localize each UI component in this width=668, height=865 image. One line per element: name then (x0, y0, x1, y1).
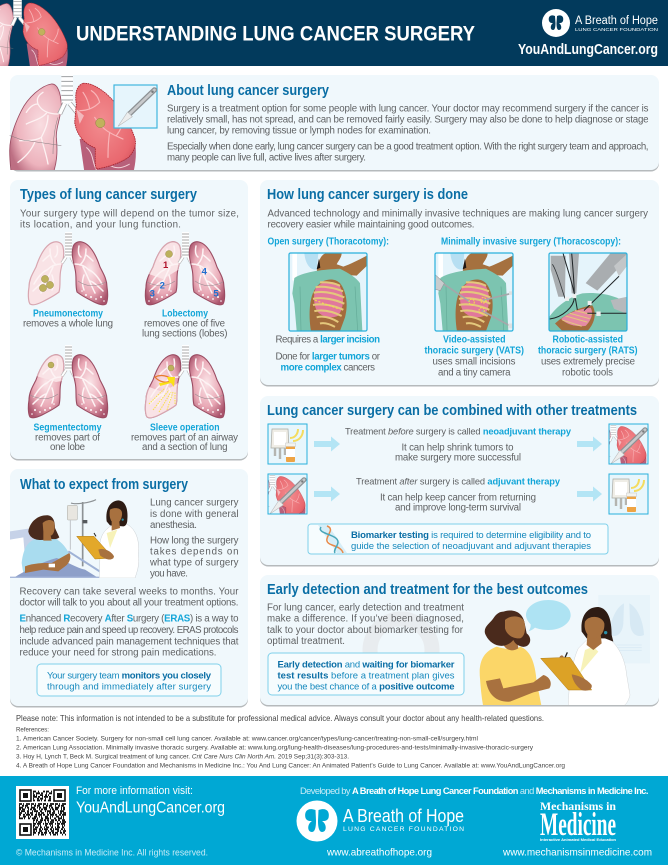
logo: A Breath of Hope: LUNG CANCER FOUNDATION (575, 27, 658, 32)
expect text beside illustration: you have. (150, 568, 188, 580)
ERAS text: include advanced pain management techniques that (20, 636, 239, 648)
callout: monitoring: through and immediately after surgery (47, 682, 211, 692)
panel: how lung cancer surgery is done (260, 180, 659, 386)
references: 2. American Lung Association. Minimally invasive thoracic surgery. Available at: www.lung.org/lung-health-diseases/lung-procedures-and-tests/minimally-invasive-thoracic-surgery (16, 744, 534, 752)
open surgery subheading: Open surgery (Thoracotomy): (268, 236, 389, 248)
panel: combined treatments (245, 396, 659, 566)
recovery text: doctor will talk to you about all your treatment options. (20, 598, 238, 608)
types intro: Your surgery type will depend on the tumor size, (20, 208, 239, 220)
diagram: segmentectomy (28, 345, 108, 453)
diagram: lobectomy: 5 (213, 288, 219, 300)
open surgery caption: Done for larger tumors or (276, 352, 381, 362)
about lungs illustration (9, 75, 136, 170)
early text: talk to your doctor about biomarker testing for (267, 625, 464, 636)
panel: early detection and treatment (260, 575, 659, 707)
types intro: its location, and your lung function. (20, 220, 181, 230)
logo: A Breath of Hope: A Breath of Hope (575, 15, 658, 27)
callout: biomarker testing: guide the selection of neoadjuvant and adjuvant therapies (351, 541, 591, 552)
callout: biomarker testing (308, 524, 608, 554)
row: adjuvant therapy: It can help keep cancer from returning (380, 492, 536, 504)
diagram: segmentectomy: one lobe (50, 442, 85, 453)
footer url: mechanisms in medicine: www.mechanismsinmedicine.com (502, 846, 652, 858)
header banner (0, 0, 668, 69)
logo: A Breath of Hope Lung Cancer Foundation: LUNG CANCER FOUNDATION (343, 826, 464, 833)
logo: Mechanisms in Medicine: Medicine (540, 807, 616, 843)
diagram: sleeve operation: and a section of lung (142, 442, 228, 453)
early heading: Early detection and treatment for the best outcomes (267, 582, 588, 598)
about text (167, 104, 649, 164)
RATS caption: Robotic-assisted (552, 334, 623, 346)
callout: biomarker testing: Biomarker testing is required to determine eligibility and to (351, 530, 591, 541)
how intro (268, 208, 648, 230)
panel: types of lung cancer surgery (10, 180, 248, 460)
RATS caption: uses extremely precise (541, 356, 635, 368)
expect heading: What to expect from surgery (20, 477, 188, 493)
RATS caption (538, 334, 638, 378)
diagram: lobectomy: 4 (202, 267, 208, 278)
panel: about lung cancer surgery (10, 74, 659, 174)
diagram: lobectomy: removes one of five (144, 318, 225, 330)
faint scanner background (370, 619, 432, 681)
VATS caption: and a tiny camera (438, 368, 511, 378)
logo: Mechanisms in Medicine: Mechanisms in (540, 801, 617, 813)
callout: early detection: Early detection and waiting for biomarker (278, 660, 455, 670)
expect text beside illustration: anesthesia. (150, 520, 197, 531)
callout: monitoring: Your surgery team monitors you closely (47, 670, 212, 682)
diagram: pneumonectomy (23, 232, 113, 330)
expect text beside illustration: what type of surgery (149, 558, 239, 568)
ERAS text: help reduce pain and speed up recovery. ERAS protocols (20, 625, 239, 636)
recovery text (20, 586, 239, 608)
expect text beside illustration: How long the surgery (150, 536, 239, 546)
row: adjuvant therapy: and improve long-term survival (395, 502, 521, 514)
QR code (16, 786, 69, 839)
diagram: lobectomy (142, 232, 228, 340)
logo: Mechanisms in Medicine (540, 801, 617, 843)
row: adjuvant therapy (245, 472, 648, 520)
diagram: pneumonectomy: removes a whole lung (23, 318, 113, 330)
header lungs illustration (0, 0, 68, 66)
about heading: About lung cancer surgery (167, 83, 329, 99)
references: 3. Hoy H, Lynch T, Beck M. Surgical treatment of lung cancer. Crit Care Nurs Clin North Am. 2019 Sep;31(3):303-313. (16, 754, 349, 760)
footer band (0, 776, 668, 865)
expect text beside illustration: Lung cancer surgery (150, 498, 239, 508)
row: neoadjuvant therapy: It can help shrink tumors to (402, 442, 514, 454)
illustration: patient in bed with doctor (10, 499, 139, 578)
early text: make a difference. If you’ve been diagnosed, (267, 614, 464, 624)
row: adjuvant therapy: Treatment after surgery is called adjuvant therapy (356, 476, 561, 486)
about text: Surgery is a treatment option for some people with lung cancer. Your doctor may recommend surgery if the cancer is (167, 104, 649, 114)
open surgery caption (276, 334, 381, 374)
image: RATS (549, 253, 627, 331)
diagram: segmentectomy: removes part of (35, 432, 100, 444)
developed by: Developed by A Breath of Hope Lung Cancer Foundation and Mechanisms in Medicine Inc. (300, 786, 648, 796)
row: neoadjuvant therapy: Treatment before surgery is called neoadjuvant therapy (345, 426, 572, 436)
diagram: segmentectomy: Segmentectomy (34, 422, 102, 434)
references: References: (16, 726, 49, 734)
diagram: sleeve operation (131, 345, 238, 453)
diagram: sleeve operation: removes part of an airway (131, 432, 238, 444)
references: 1. American Cancer Society. Surgery for non-small cell lung cancer. Available at: www.cancer.org/cancer/types/lung-cancer/treating-non-small-cell/surgery.html (16, 736, 478, 742)
references: 4. A Breath of Hope Lung Cancer Foundation and Mechanisms in Medicine Inc.: You And Lung Cancer: An Animated Patient’s Guide to Lung Cancer. Available at: www.YouAndLungCancer.org (16, 762, 565, 770)
callout: early detection (268, 653, 464, 695)
illustration: patient talking with doctor (480, 600, 644, 705)
open surgery caption: more complex cancers (280, 362, 375, 374)
expect text beside illustration: is done with general (150, 509, 238, 520)
VATS caption (424, 334, 524, 378)
about text: Especially when done early, lung cancer surgery can be a good treatment option. With the right surgery team and approach, (167, 142, 648, 152)
VATS caption: uses small incisions (432, 356, 516, 368)
expect text beside illustration (149, 498, 239, 580)
copyright: © Mechanisms in Medicine Inc. All rights reserved. (16, 848, 208, 858)
about text: many people can live full, active lives after surgery. (167, 152, 366, 164)
logo: A Breath of Hope (542, 9, 658, 37)
minimally invasive subheading: Minimally invasive surgery (Thoracoscopy): (441, 236, 621, 248)
how intro: recovery easier while maintaining good outcomes. (268, 220, 474, 230)
footer website: YouAndLungCancer.org (76, 800, 225, 816)
VATS caption: Video-assisted (443, 334, 506, 346)
panel: what to expect from surgery (10, 469, 248, 708)
diagram: lobectomy: 1 (163, 260, 169, 271)
callout: monitoring (37, 664, 221, 696)
icon: DNA helix (318, 525, 347, 553)
more information: For more information visit: (76, 785, 193, 797)
callout: early detection: test results before a treatment plan gives (278, 670, 455, 682)
types heading: Types of lung cancer surgery (20, 187, 197, 203)
image: VATS (435, 253, 513, 331)
recovery text: Recovery can take several weeks to months. Your (20, 586, 239, 598)
ERAS text: reduce your need for strong pain medications. (20, 648, 216, 658)
diagram: lobectomy: 3 (150, 288, 155, 300)
types intro (20, 208, 239, 230)
logo: A Breath of Hope Lung Cancer Foundation: A Breath of Hope (343, 806, 464, 826)
RATS caption: robotic tools (562, 368, 613, 378)
logo: A Breath of Hope Lung Cancer Foundation (296, 800, 464, 842)
ERAS text (20, 614, 239, 658)
expect text beside illustration: takes depends on (150, 546, 238, 558)
diagram: sleeve operation: Sleeve operation (150, 422, 220, 434)
VATS caption: thoracic surgery (VATS) (424, 346, 524, 356)
early text (267, 602, 464, 647)
about text: relatively small, has not spread, and can be removed fairly easily. Surgery may also be done to help diagnose or stage (167, 114, 648, 126)
early text: optimal treatment. (267, 636, 345, 647)
diagram: pneumonectomy: Pneumonectomy (33, 308, 103, 320)
row: neoadjuvant therapy (268, 422, 648, 470)
icon: scalpel (114, 85, 157, 128)
references (16, 726, 565, 770)
footer url: a breath of hope: www.abreathofhope.org (326, 846, 432, 858)
diagram: lobectomy: Lobectomy (162, 308, 208, 320)
early text: For lung cancer, early detection and treatment (267, 602, 464, 614)
row: neoadjuvant therapy: make surgery more successful (395, 452, 521, 464)
image: open surgery (289, 253, 367, 331)
how intro: Advanced technology and minimally invasive techniques are making lung cancer surgery (268, 208, 648, 220)
logo: Mechanisms in Medicine: Interactive Animated Medical Education (540, 837, 617, 842)
how heading: How lung cancer surgery is done (267, 187, 468, 203)
open surgery caption: Requires a larger incision (276, 334, 380, 346)
RATS caption: thoracic surgery (RATS) (538, 346, 638, 356)
title: UNDERSTANDING LUNG CANCER SURGERY (76, 22, 475, 46)
diagram: lobectomy: 2 (160, 280, 165, 292)
callout: early detection: you the best chance of a positive outcome (278, 682, 454, 692)
diagram: lobectomy: lung sections (lobes) (142, 328, 228, 340)
about text: lung cancer, by removing tissue or lymph nodes for examination. (167, 126, 431, 136)
disclaimer note: Please note: This information is not intended to be a substitute for professional medical advice. Always consult your doctor about any health-related questions. (16, 713, 544, 723)
ERAS text: Enhanced Recovery After Surgery (ERAS) is a way to (20, 614, 238, 624)
